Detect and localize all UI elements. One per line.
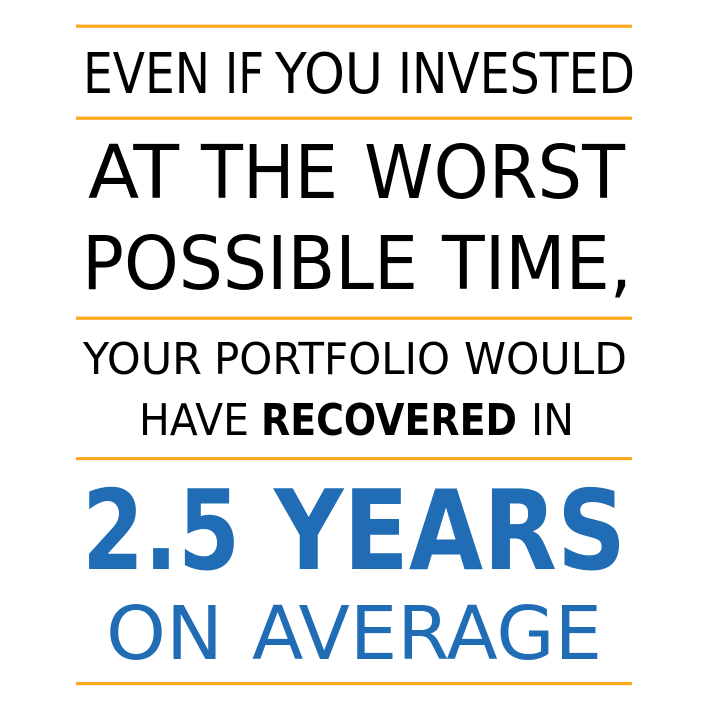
heading line: even if you invested: YOU	[274, 42, 383, 107]
heading line: even if you invested: EVEN	[83, 42, 210, 107]
heading line: possible time: TIME,	[441, 221, 632, 307]
subheading: on average: ON	[106, 591, 223, 677]
heading line: at the worst: AT	[88, 130, 180, 216]
subheading: on average: AVERAGE	[252, 591, 602, 677]
subheading: on average	[106, 591, 602, 677]
text line: your portfolio would	[82, 334, 627, 385]
text line: have recovered in: RECOVERED	[261, 395, 517, 446]
heading line: possible time: POSSIBLE	[82, 221, 418, 307]
heading line: even if you invested: IF	[225, 42, 264, 107]
key figure: 2.5 years: YEARS	[272, 467, 626, 596]
heading line: at the worst: THE	[200, 130, 338, 216]
text line: have recovered in	[139, 395, 574, 446]
heading line: even if you invested: INVESTED	[398, 42, 635, 107]
text line: your portfolio would: WOULD	[464, 334, 627, 385]
heading line: at the worst	[88, 130, 626, 216]
heading line: even if you invested	[83, 42, 635, 107]
text line: your portfolio would: YOUR	[82, 334, 202, 385]
key figure: 2.5 years: 2.5	[82, 467, 240, 596]
heading line: possible time	[82, 221, 632, 307]
heading line: at the worst: WORST	[364, 130, 626, 216]
text line: have recovered in: HAVE	[139, 395, 249, 446]
key figure: 2.5 years	[82, 467, 626, 596]
text line: your portfolio would: PORTFOLIO	[214, 334, 450, 385]
text line: have recovered in: IN	[531, 395, 574, 446]
